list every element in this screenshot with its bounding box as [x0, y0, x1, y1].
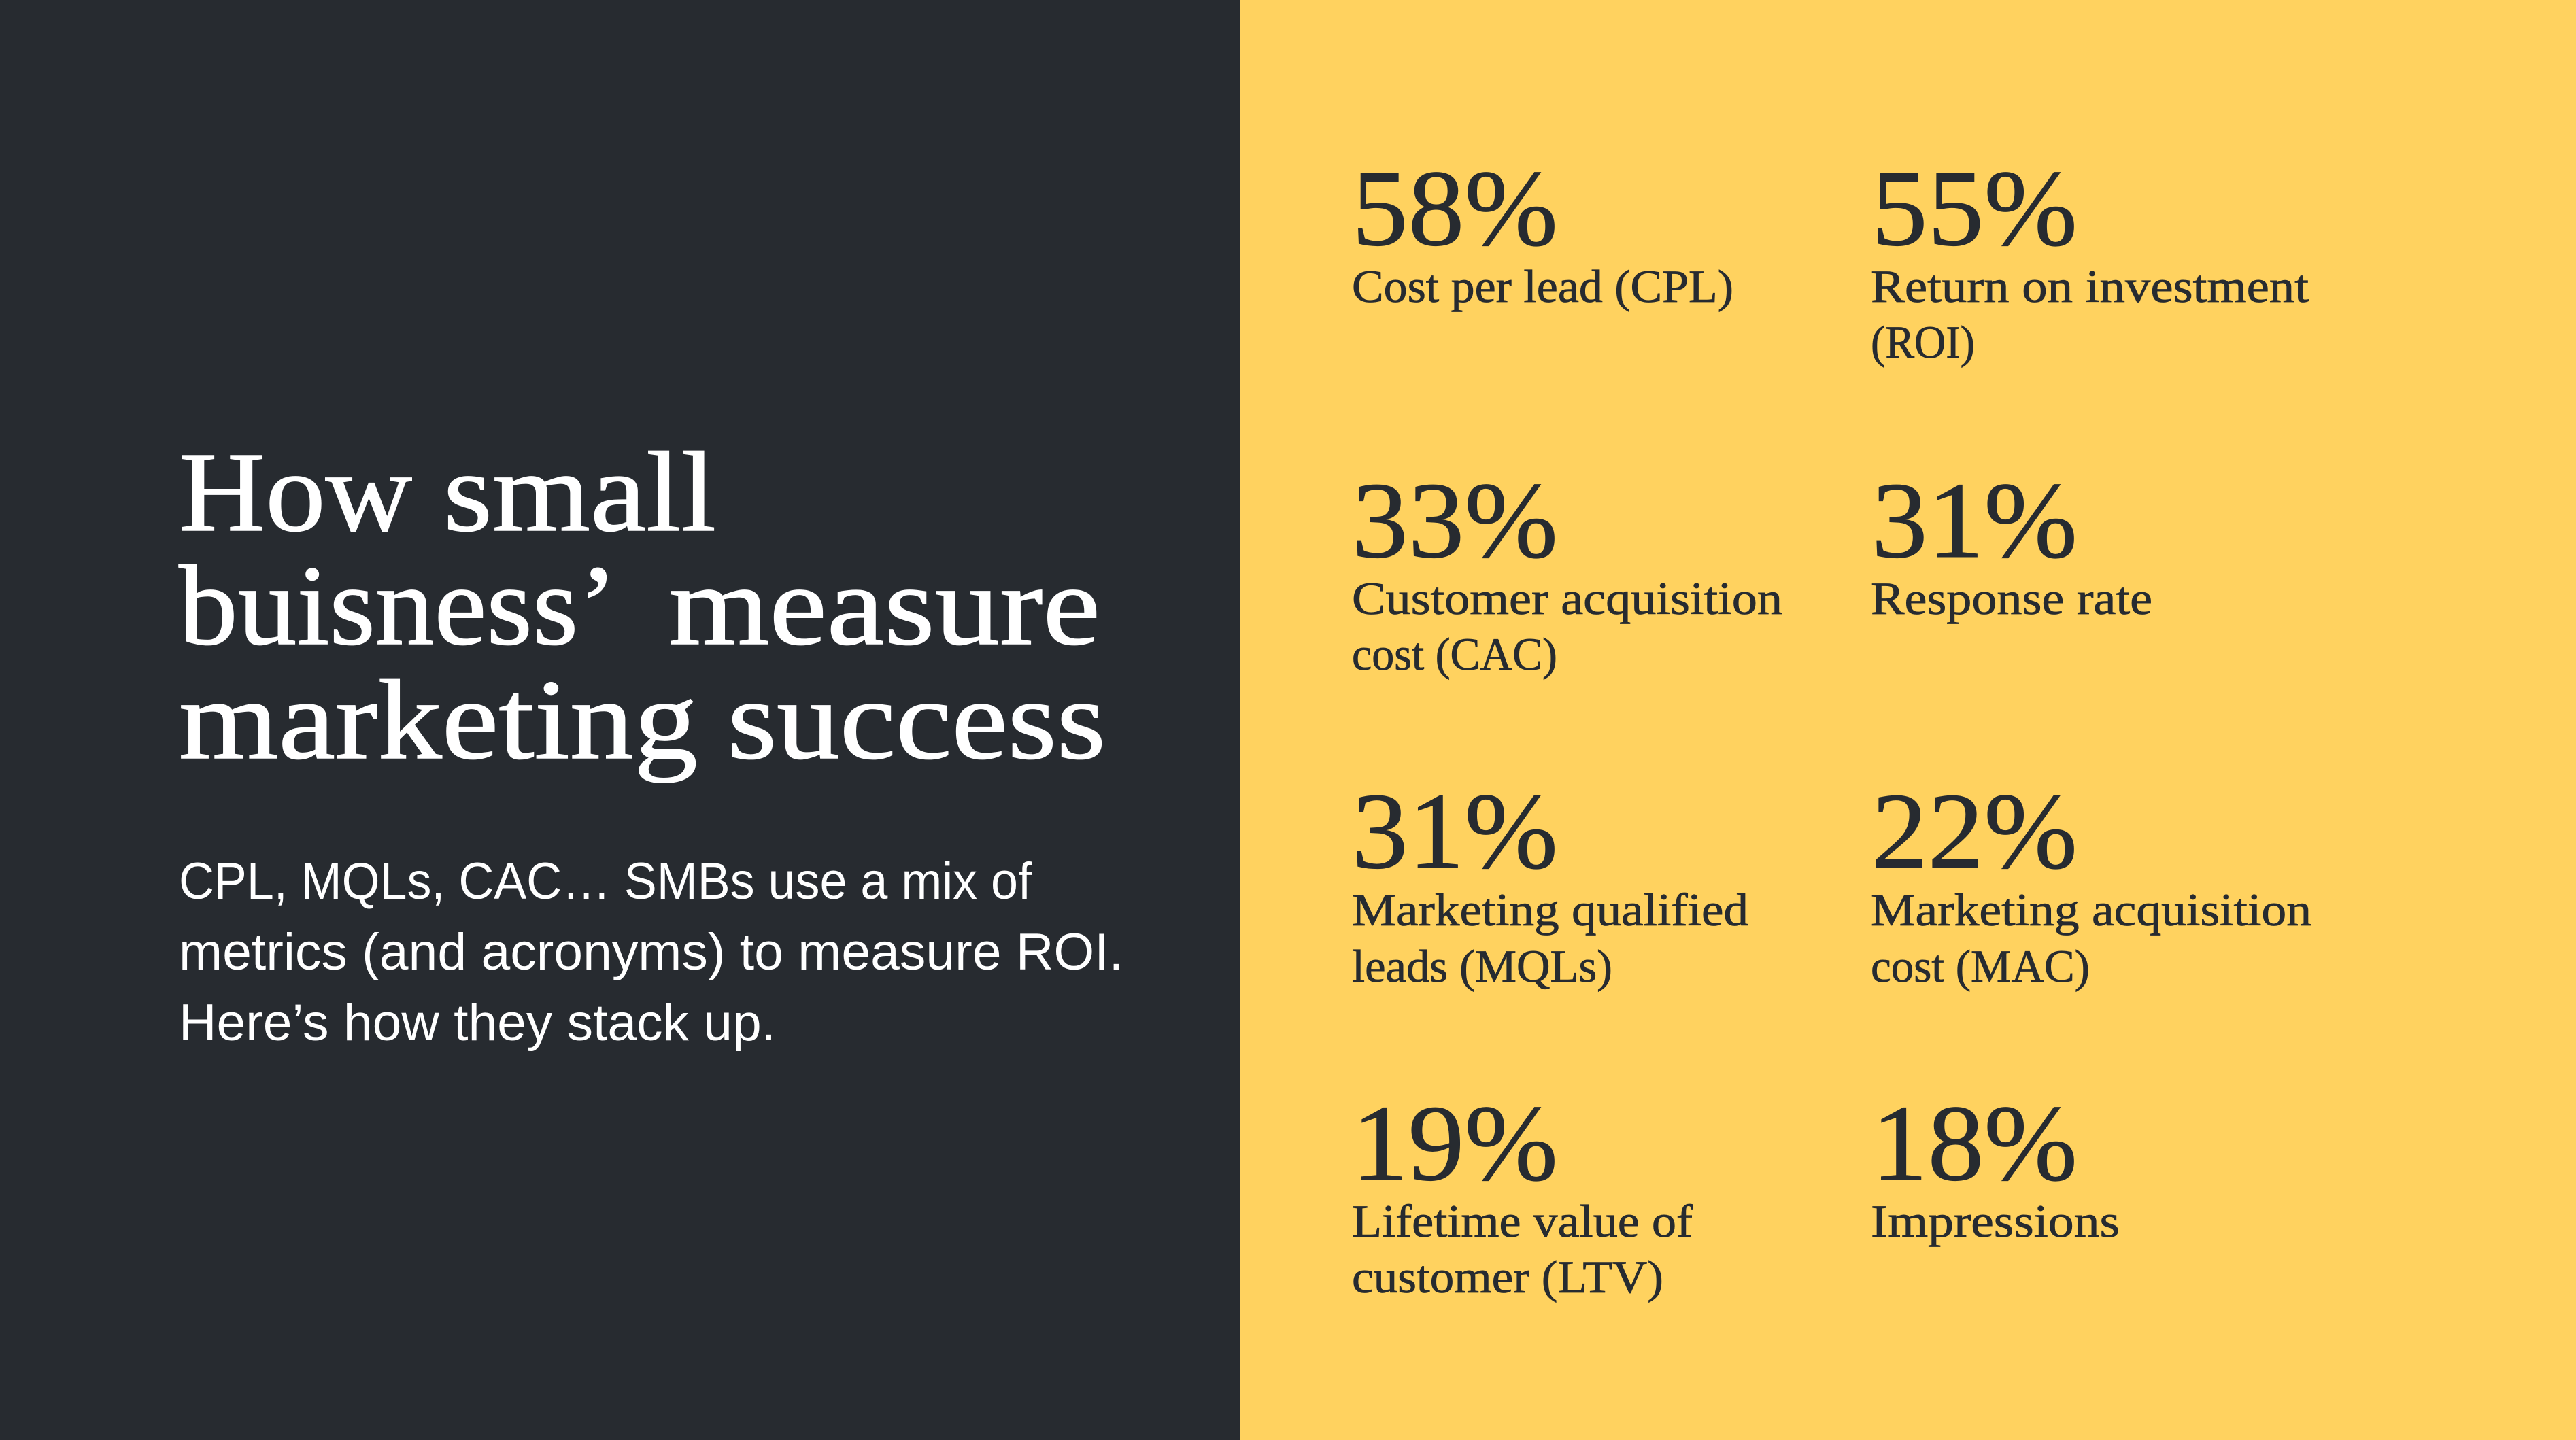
title: small	[443, 429, 716, 555]
stat: return on investment 55%	[1871, 148, 2309, 368]
intro text block: CPL, MQLs, CAC… SMBs use a mix of	[179, 853, 1032, 910]
stat: cost per lead 58%: Cost per lead (CPL)	[1352, 260, 1733, 312]
stat: customer acquisition cost 33%: 33%	[1352, 460, 1558, 581]
stat: marketing qualified leads 31%	[1352, 770, 1748, 992]
title: How	[179, 429, 412, 555]
stat: cost per lead 58%	[1352, 148, 1733, 312]
title: buisness’	[179, 543, 617, 669]
stat: marketing acquisition cost 22%	[1871, 770, 2311, 992]
stat: lifetime value of customer 19%	[1352, 1082, 1693, 1303]
stat: lifetime value of customer 19%: Lifetime value of	[1352, 1195, 1693, 1247]
title: marketing	[179, 657, 698, 783]
title: measure	[668, 543, 1100, 669]
stat: lifetime value of customer 19%: 19%	[1352, 1082, 1558, 1203]
stat: marketing acquisition cost 22%: 22%	[1871, 770, 2078, 891]
stat: return on investment 55%: 55%	[1871, 148, 2078, 269]
stat: response rate 31%	[1871, 460, 2152, 624]
stat: customer acquisition cost 33%: Customer acquisition	[1352, 572, 1782, 624]
stat: marketing qualified leads 31%: 31%	[1352, 770, 1558, 891]
stat: cost per lead 58%: 58%	[1352, 148, 1558, 269]
stat: customer acquisition cost 33%: cost (CAC)	[1352, 628, 1557, 680]
title	[179, 429, 1106, 783]
stat: impressions 18%: Impressions	[1871, 1195, 2120, 1247]
panel: yellow right background	[1240, 0, 2576, 1440]
stat: marketing qualified leads 31%: leads (MQLs)	[1352, 940, 1612, 992]
stat: customer acquisition cost 33%	[1352, 460, 1782, 680]
stat: response rate 31%: Response rate	[1871, 572, 2152, 624]
intro text block: Here’s how they stack up.	[179, 994, 776, 1052]
stat: return on investment 55%: (ROI)	[1871, 316, 1975, 368]
intro text block: metrics (and acronyms) to measure ROI.	[179, 923, 1123, 981]
panel: dark left background	[0, 0, 1240, 1440]
stat: marketing acquisition cost 22%: cost (MAC)	[1871, 940, 2090, 992]
stat: marketing acquisition cost 22%: Marketing acquisition	[1871, 884, 2311, 936]
stat: impressions 18%: 18%	[1871, 1082, 2078, 1203]
stat: return on investment 55%: Return on investment	[1871, 260, 2309, 312]
stat: lifetime value of customer 19%: customer (LTV)	[1352, 1251, 1663, 1303]
stat: response rate 31%: 31%	[1871, 460, 2078, 581]
stat: marketing qualified leads 31%: Marketing qualified	[1352, 884, 1748, 936]
intro text block	[179, 853, 1123, 1052]
stat: impressions 18%	[1871, 1082, 2120, 1247]
title: success	[728, 657, 1106, 783]
